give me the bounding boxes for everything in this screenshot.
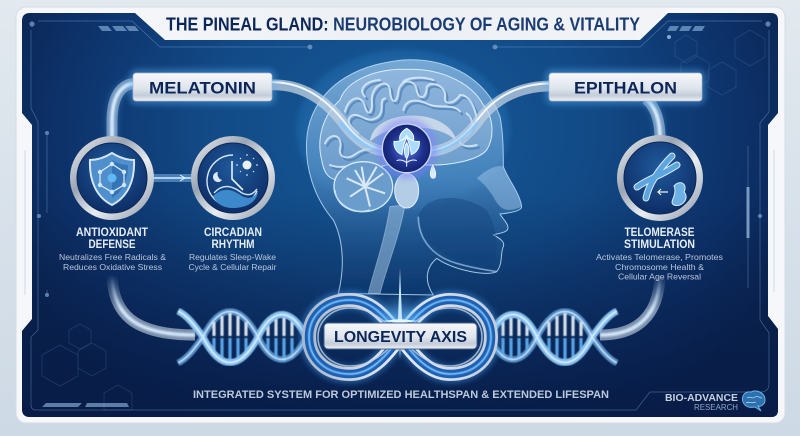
- brain back glow: [297, 50, 510, 210]
- jaw contour: [418, 217, 497, 272]
- face shading: [477, 166, 522, 210]
- epithalon label plate: EPITHALON: [574, 78, 677, 98]
- brain mass: [320, 69, 492, 180]
- icon: telomerase chromosome: [617, 135, 703, 221]
- icon: circadian clock and wave: [191, 136, 275, 220]
- head and brain illustration: [270, 50, 550, 295]
- longevity axis plate: LONGEVITY AXIS: [334, 329, 467, 346]
- bottom tagline: INTEGRATED SYSTEM FOR OPTIMIZED HEALTHSPAN & EXTENDED LIFESPAN: [193, 389, 609, 401]
- pineal gland orb: [376, 118, 437, 179]
- text: circadian rhythm: [188, 227, 277, 272]
- text: telomerase stimulation: STIMULATION: [624, 239, 695, 251]
- melatonin label plate: [129, 69, 276, 105]
- right scale meter: [746, 187, 750, 238]
- text: antioxidant defense: [59, 227, 166, 272]
- corpus callosum band: [370, 116, 457, 142]
- text: circadian rhythm: RHYTHM: [212, 239, 254, 251]
- text: circadian rhythm: Regulates Sleep-Wake: [189, 252, 276, 262]
- text: antioxidant defense: DEFENSE: [88, 239, 136, 251]
- tubes through the brain: [270, 82, 550, 152]
- droplet: [430, 165, 436, 178]
- tube: melatonin to antioxidant: [112, 84, 136, 138]
- connector arrow antioxidant to circadian: [153, 175, 192, 181]
- faint hexagon pattern: [42, 30, 765, 410]
- brand: bio-advance research: [665, 391, 765, 412]
- text: antioxidant defense: ANTIOXIDANT: [76, 227, 148, 239]
- epithalon label plate: [545, 69, 706, 105]
- brand: bio-advance research: BIO-ADVANCE: [665, 393, 738, 404]
- infinity longevity symbol: [309, 300, 491, 374]
- left DNA helix: [178, 311, 306, 363]
- light flare: [382, 268, 418, 360]
- longevity axis plate: [324, 323, 477, 349]
- text: circadian rhythm: Cycle & Cellular Repair: [188, 262, 277, 272]
- head silhouette: [306, 60, 522, 295]
- text: telomerase stimulation: TELOMERASE: [624, 227, 695, 239]
- tube: antioxidant to longevity: [112, 272, 195, 335]
- cerebellum: [334, 162, 393, 212]
- title tab: [135, 8, 668, 41]
- text: telomerase stimulation: Cellular Age Reversal: [618, 272, 701, 282]
- tube: epithalon to telomerase: [646, 99, 660, 138]
- text: telomerase stimulation: Chromosome Health &: [615, 262, 704, 272]
- brainstem and spinal cord: [368, 173, 419, 293]
- right DNA helix: [489, 311, 617, 363]
- text: circadian rhythm: CIRCADIAN: [204, 227, 262, 239]
- text: telomerase stimulation: [596, 227, 723, 282]
- brain folds: [325, 78, 479, 170]
- melatonin label plate: MELATONIN: [149, 78, 256, 98]
- icon: antioxidant shield: [70, 136, 154, 220]
- pineal cone icon: [394, 128, 419, 167]
- text: antioxidant defense: Neutralizes Free Radicals &: [59, 252, 166, 262]
- text: antioxidant defense: Reduces Oxidative Stress: [63, 262, 162, 272]
- brand: bio-advance research: RESEARCH: [694, 403, 738, 412]
- icon: brand brain: [742, 391, 765, 411]
- text: telomerase stimulation: Activates Telomerase, Promotes: [596, 252, 723, 262]
- title: THE PINEAL GLAND: NEUROBIOLOGY OF AGING & VITALITY: [166, 14, 640, 34]
- left frame scale: [25, 150, 774, 295]
- tube: telomerase to longevity: [600, 272, 660, 335]
- cheek shading: [418, 198, 497, 267]
